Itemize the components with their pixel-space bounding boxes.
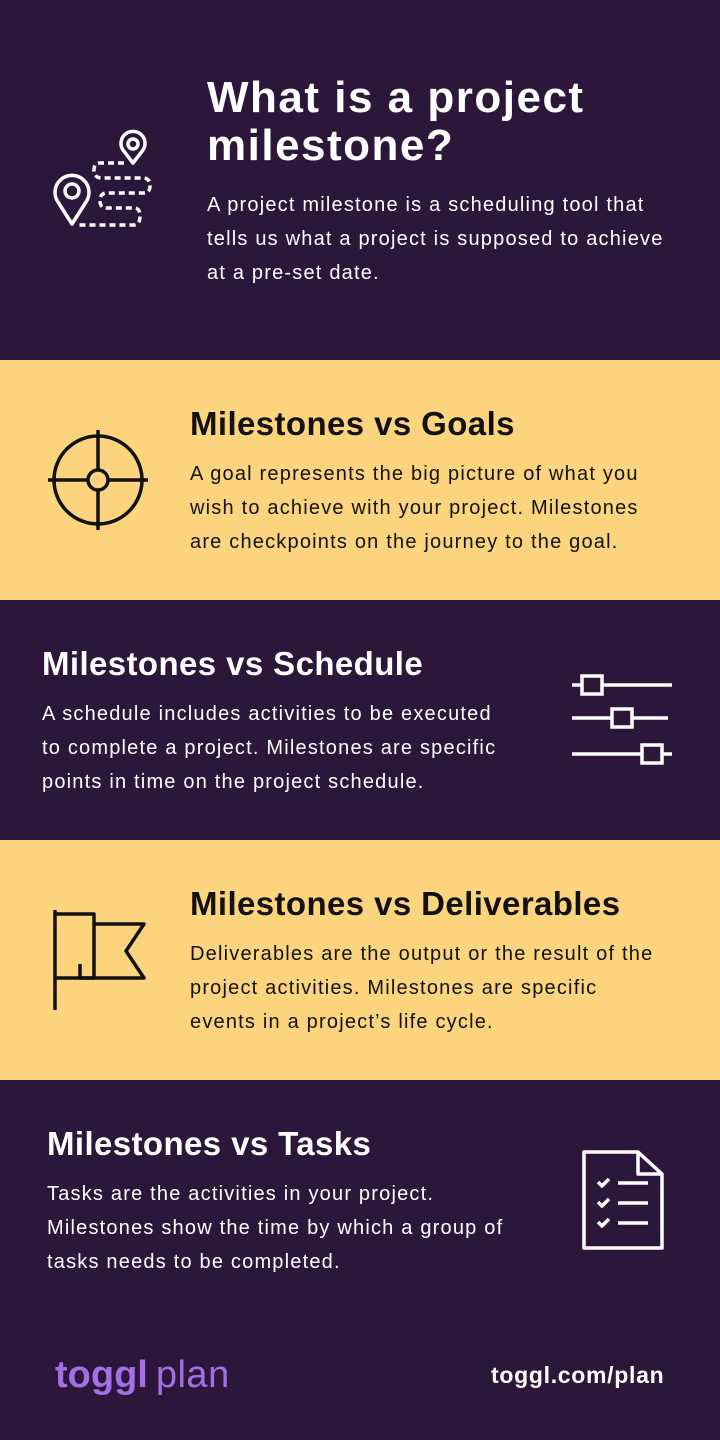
heading: Milestones vs Tasks [47, 1125, 371, 1162]
icon: sliders [572, 674, 672, 765]
text: definition [207, 194, 664, 284]
text: A goal represents the big picture of what you [190, 463, 639, 485]
icon: flag [53, 910, 146, 1010]
heading: Milestones vs Goals [190, 405, 515, 442]
text: to complete a project. Milestones are specific [42, 737, 496, 759]
text [47, 1183, 503, 1273]
panel: schedule [0, 600, 720, 840]
heading: Milestones vs Deliverables [190, 885, 620, 922]
text: are checkpoints on the journey to the goal. [190, 531, 619, 553]
text [42, 703, 496, 793]
text: points in time on the project schedule. [42, 771, 425, 793]
panel: intro [0, 0, 720, 360]
text: definition: A project milestone is a scheduling tool that [207, 194, 645, 216]
text: definition: tells us what a project is supposed to achieve [207, 228, 664, 250]
text: A schedule includes activities to be executed [42, 703, 492, 725]
text [190, 943, 653, 1033]
text: Milestones show the time by which a group of [47, 1217, 503, 1239]
heading: Milestones vs Schedule [42, 645, 423, 682]
url: toggl.com/plan [491, 1362, 664, 1388]
panel: tasks [0, 1080, 720, 1440]
icon: checklist document [582, 1150, 664, 1250]
logo: toggl plan: togglplan [55, 1354, 230, 1396]
panel: goals [0, 360, 720, 600]
icon: map route [53, 130, 152, 227]
text: project activities. Milestones are specific [190, 977, 597, 999]
text: Deliverables are the output or the result of the [190, 943, 653, 965]
text [190, 463, 639, 553]
title [207, 73, 585, 170]
text: events in a project’s life cycle. [190, 1011, 494, 1033]
title: milestone? [207, 121, 454, 170]
text: tasks needs to be completed. [47, 1251, 341, 1273]
text: wish to achieve with your project. Milestones [190, 497, 639, 519]
title: What is a project [207, 73, 585, 122]
panel: deliverables [0, 840, 720, 1080]
text: definition: at a pre-set date. [207, 262, 380, 284]
text: Tasks are the activities in your project. [47, 1183, 434, 1205]
icon: target [48, 430, 148, 530]
